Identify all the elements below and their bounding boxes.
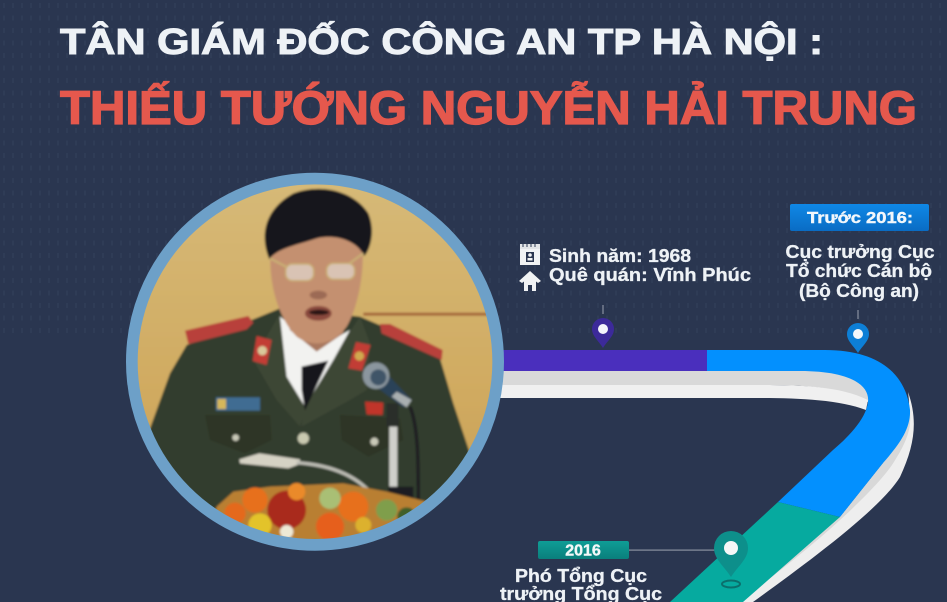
text: before 2016 role: Tổ chức Cán bộ [786,261,932,281]
road: outer edge light [725,392,914,602]
text: before 2016 role: Cục trưởng Cục [786,242,934,262]
pin: purple [592,305,614,348]
text: 2016 role [500,566,662,602]
label: before 2016 [786,204,934,301]
title [60,20,917,134]
flowers [203,483,427,543]
title line 1: TÂN GIÁM ĐỐC CÔNG AN TP HÀ NỘI : [60,20,823,62]
birth year: Sinh năm: 1968 [549,246,691,266]
text: before 2016 role: (Bộ Công an) [799,281,919,301]
road: outer edge gray [725,412,910,602]
neck and face [289,328,345,352]
road: purple segment [500,350,707,371]
microphone [387,404,398,419]
icon: house [519,271,541,291]
pocket flaps [205,415,272,453]
label: 2016 [500,541,716,602]
badge: 2016: 2016 [565,542,601,560]
portrait photo [132,179,500,544]
photo content [133,183,500,543]
collar tabs [253,336,272,365]
shirt and tie [280,317,350,407]
road: blue segment [707,350,910,517]
badge: before 2016: Trước 2016: [807,210,913,227]
timeline road [500,350,914,602]
wall background [138,184,492,452]
glasses [270,253,363,267]
name plate [216,397,260,411]
hometown: Quê quán: Vĩnh Phúc [549,265,751,285]
badge: before 2016 [790,204,929,231]
connector [629,550,716,551]
icon: calendar [520,243,540,265]
buttons [232,434,239,441]
road: teal segment [670,502,840,602]
text: before 2016 role [786,242,934,301]
pin: blue [847,310,869,353]
flag pin [365,402,383,415]
epaulets [185,316,253,344]
hair [265,189,372,259]
reading lamp [239,453,300,468]
title line 2: THIẾU TƯỚNG NGUYỄN HẢI TRUNG [60,81,917,134]
text: 2016 role: Phó Tổng Cục [515,566,647,586]
road: side band gray [500,365,871,402]
pin: teal [714,531,748,588]
badge: 2016 [538,541,629,560]
birth info [519,243,751,291]
road: side band light [500,385,868,410]
jacket [150,308,470,510]
photo ring [132,179,498,544]
